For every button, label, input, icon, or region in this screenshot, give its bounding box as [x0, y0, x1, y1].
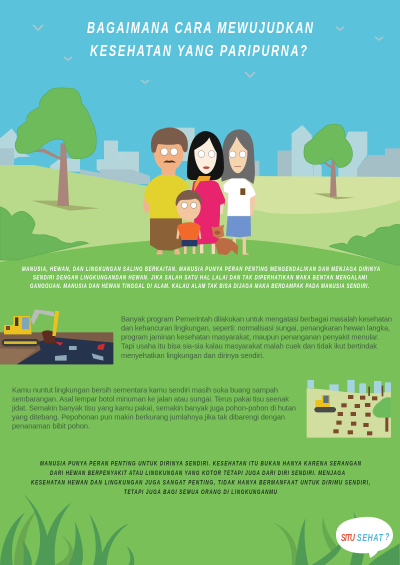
- paragraph: government programs: dan kehancuran lingkungan, seperti: normalisasi sungai, penangkaran hewan langka,: [121, 324, 390, 332]
- speech bubble: Situ Sehat: SEHAT: [357, 532, 383, 543]
- speech bubble: Situ Sehat: [336, 517, 393, 558]
- father: [143, 128, 189, 254]
- paragraph: personal habits: yang ditebang. Pepohonan pun makin berkurang jumlahnya jika tak dibarengi dengan: [12, 412, 285, 422]
- tree: large left: [15, 88, 99, 211]
- hills: [0, 165, 400, 266]
- mother: [187, 131, 225, 254]
- paragraph: personal habits: jidat. Semakin banyak tisu yang kamu pakai, semakin banyak juga pohon-pohon di hutan: [11, 404, 296, 412]
- background: green lower panel: [0, 256, 400, 565]
- paragraph: personal habits: [11, 386, 296, 430]
- paragraph: government programs: Tapi usaha itu bisa sia-sia kalau masyarakat malah cuek dan tidak ikut bertindak: [121, 342, 377, 351]
- title: BAGAIMANA CARA MEWUJUDKAN: [87, 19, 313, 36]
- grass: right: [273, 512, 400, 565]
- paragraph: government programs: [121, 314, 392, 360]
- paragraph: closing: MANUSIA PUNYA PERAN PENTING UNTUK DIRINYA SENDIRI. KESEHATAN ITU BUKAN HANYA KARENA SERANGAN: [40, 461, 362, 468]
- city skyline: centre: [100, 128, 300, 184]
- paragraph: intro: SENDIRI DENGAN LINGKUNGANDAN HEWAN. JIKA SALAH SATU HAL LALAI DAN TAK DIPERHATIKAN MAKA BENTAN MENGALAMI: [33, 275, 367, 282]
- city skyline: left: [0, 128, 131, 185]
- grass: left: [0, 494, 134, 565]
- birds: [33, 25, 383, 83]
- family: [143, 128, 256, 255]
- illustration: deforestation: [307, 380, 391, 438]
- paragraph: government programs: menyehatkan lingkungan dan dirinya sendiri.: [121, 351, 264, 360]
- bush: left: [0, 207, 88, 260]
- city skyline: right: [278, 125, 400, 177]
- tree: small right: [304, 124, 355, 199]
- dog: [212, 225, 238, 255]
- girl: [221, 129, 256, 255]
- speech bubble: Situ Sehat: ?: [385, 531, 390, 542]
- paragraph: intro: GANGGUAN. MANUSIA DAN HEWAN TINGGAL DI ALAM. KALAU ALAM TAK BISA DIJAGA MAKA BERDAMPAK PADA MANUSIA SENDIRI.: [30, 283, 369, 290]
- speech bubble: Situ Sehat: SITU: [341, 532, 356, 543]
- paragraph: personal habits: Kamu nuntut lingkungan bersih sementara kamu sendiri masih suka buang sampah: [12, 386, 278, 394]
- paragraph: personal habits: penanaman bibit pohon.: [12, 422, 90, 430]
- paragraph: personal habits: sembarangan. Asal lempar botol minuman ke jalan atau sungai. Terus pakai tisu seenak: [12, 394, 289, 404]
- title: KESEHATAN YANG PARIPURNA?: [90, 42, 307, 59]
- title: [87, 19, 313, 59]
- background: sky: [0, 0, 400, 260]
- paragraph: closing: [31, 461, 370, 496]
- bush: right: [329, 224, 400, 265]
- paragraph: intro: MANUSIA, HEWAN, DAN LINGKUNGAN SALING BERKAITAN. MANUSIA PUNYA PERAN PENTING MENGENDALIKAN DAN MENJAGA DIRINYA: [22, 266, 380, 273]
- paragraph: intro: [22, 266, 380, 290]
- boy: [176, 190, 202, 254]
- paragraph: closing: DARI HEWAN BERPENYAKIT ATAU LINGKUNGAN YANG KOTOR TETAPI JUGA DARI DIRI SENDIRI. MENJAGA: [50, 470, 345, 477]
- illustration: excavator and polluted river: [0, 309, 113, 364]
- paragraph: closing: KESEHATAN HEWAN DAN LINGKUNGAN JUGA SANGAT PENTING, TIDAK HANYA BERMANFAAT UNTUK DIRIMU SENDIRI,: [31, 480, 370, 487]
- paragraph: government programs: program jaminan kesehatan masyarakat, maupun penanganan penyakit menular.: [121, 333, 379, 342]
- paragraph: closing: TETAPI JUGA BAGI SEMUA ORANG DI LINGKUNGANMU: [124, 489, 278, 496]
- paragraph: government programs: Banyak program Pemerintah dilakukan untuk mengatasi berbagai masalah kesehatan: [121, 314, 392, 324]
